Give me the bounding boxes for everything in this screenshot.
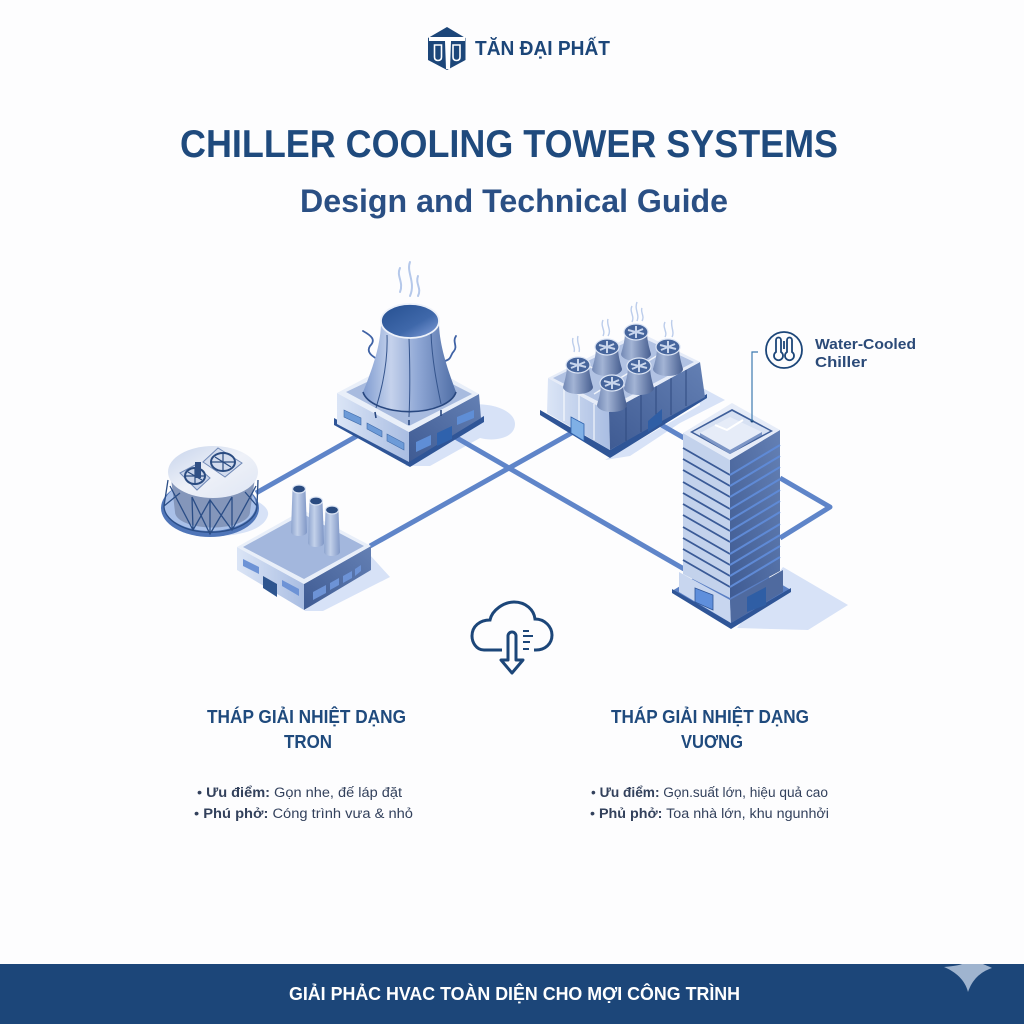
doors [571, 417, 584, 441]
icon: thermometers [766, 332, 802, 368]
right wall [609, 362, 705, 450]
bullet list: round tower: • Ưu điểm: Gọn nhe, đế láp đặt [197, 785, 402, 800]
right wall floor lines [730, 445, 780, 587]
bullet list: round tower: • Phú phở: Cóng trình vưa & nhỏ [194, 806, 413, 821]
factory with smokestacks [237, 485, 371, 610]
pipes connecting the system [256, 423, 830, 569]
base plate [540, 394, 707, 458]
high-rise building [672, 403, 791, 629]
footer banner [0, 964, 1024, 1024]
tank top [168, 446, 258, 498]
bullet list: round tower [194, 785, 413, 821]
tower base plate [334, 416, 484, 467]
base surface [672, 555, 791, 626]
factory roof [237, 510, 371, 584]
fan units [180, 448, 242, 490]
banner text: GIẢI PHẢC HVAC TOÀN DIỆN CHO MỢI CÔNG TRÌNH [289, 983, 740, 1004]
tower right wall [730, 430, 780, 598]
factory left wall [237, 547, 304, 610]
bullet list: square tower: • Phủ phở: Toa nhà lớn, khu ngunhởi [590, 806, 829, 821]
subtitle: Design and Technical Guide [300, 183, 728, 219]
factory windows and door [243, 559, 361, 600]
heading: round tower: THÁP GIẢI NHIỆT DẠNG [207, 706, 406, 727]
steam [573, 302, 673, 352]
stacks [291, 485, 340, 556]
tower right wall [409, 394, 481, 462]
icon: cloud download [472, 602, 552, 673]
logo wordmark: TĂN ĐẠI PHẤT [475, 37, 610, 60]
square modular cooling tower [540, 302, 707, 458]
panel: round tower [194, 706, 413, 821]
callout label: Water-Cooled [815, 336, 916, 353]
steam [399, 262, 419, 296]
heading: square tower: THÁP GIẢI NHIỆT DẠNG [611, 706, 809, 727]
round cooling tower [161, 446, 259, 537]
icon: hexagon logo mark [428, 27, 466, 70]
callout: water-cooled chiller: Chiller [815, 354, 867, 371]
doors [695, 588, 713, 610]
decorative star [944, 964, 992, 992]
callout: water-cooled chiller [752, 332, 916, 421]
title: CHILLER COOLING TOWER SYSTEMS [180, 123, 838, 166]
roof [683, 403, 780, 460]
panel: square tower [590, 706, 829, 821]
tower roof [337, 355, 479, 432]
hyperbolic cooling tower [334, 262, 484, 467]
lower block left [679, 572, 731, 623]
tower left wall [337, 393, 409, 462]
factory right wall [304, 546, 371, 610]
heading: square tower [611, 706, 809, 752]
heading: round tower [207, 706, 406, 752]
base plate [672, 588, 791, 629]
tank base [161, 479, 259, 537]
bullet list: square tower: • Ưu điểm: Gọn.suất lớn, hiệu quả cao [591, 785, 828, 800]
left wall floor lines [683, 448, 730, 587]
steel frame [164, 480, 258, 534]
shadows under buildings [220, 385, 848, 630]
fans [563, 324, 683, 412]
lower block right [730, 570, 783, 623]
roof [548, 332, 700, 412]
logo: Tân Đại Phát [428, 27, 610, 70]
tower windows and door [344, 410, 474, 452]
leader line [752, 352, 758, 421]
heading: round tower: TRON [284, 732, 332, 752]
cooling hyperboloid [363, 322, 456, 412]
bullet list: square tower [590, 785, 829, 821]
tower left wall [683, 433, 730, 598]
left wall [547, 378, 610, 450]
tank body [171, 478, 255, 528]
heading: square tower: VUƠNG [681, 732, 743, 752]
